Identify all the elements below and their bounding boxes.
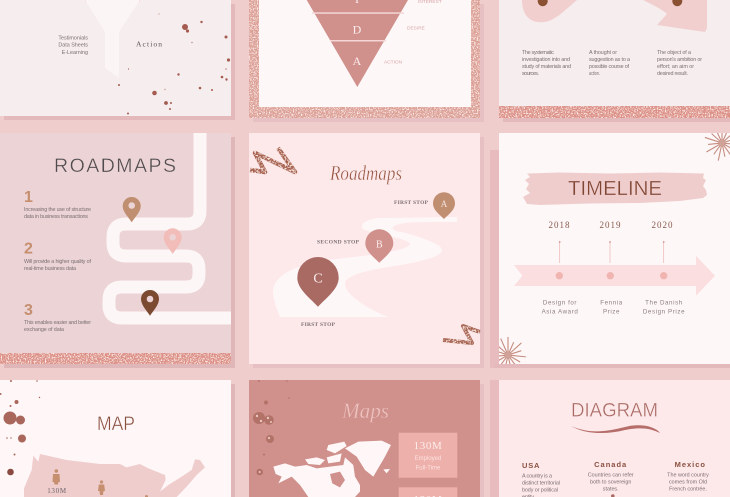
inverted triangle	[307, 0, 408, 87]
triangle letters: D	[353, 22, 362, 36]
definition column 1	[522, 50, 571, 77]
milestone labels: Fennia	[600, 299, 623, 306]
Mexico column: The word country	[667, 472, 709, 478]
Mexico column	[667, 460, 709, 492]
definition column 1: The systematic	[522, 50, 554, 56]
starburst top	[704, 133, 730, 161]
definition column 2: A thought or	[589, 50, 617, 56]
USA column: A country is a	[522, 474, 552, 480]
stat box 1	[399, 433, 457, 478]
glitter squiggle top	[250, 148, 295, 172]
title: ROADMAPS	[54, 155, 176, 177]
definition column 2: possible course of	[589, 64, 630, 70]
funnel shape	[85, 0, 140, 78]
script title: Maps	[341, 398, 389, 423]
panel: diagram slide	[490, 380, 730, 497]
Canada marker	[611, 494, 615, 497]
glitter splatter	[0, 380, 40, 475]
Canada column: both to sovereign	[590, 480, 631, 486]
map pin 3	[141, 290, 159, 316]
starburst bottom	[499, 337, 526, 364]
milestone labels: Asia Award	[542, 308, 578, 316]
panel: three definitions slide	[499, 0, 730, 122]
definition column 3: person's ambition or	[657, 57, 702, 63]
stage labels: INTEREST	[418, 0, 442, 5]
stop labels: FIRST STOP	[301, 322, 336, 328]
glitter squiggle bottom	[443, 326, 480, 343]
stage labels: DESIRE	[407, 26, 425, 32]
USA column	[522, 461, 560, 497]
years	[548, 220, 674, 230]
Canada column: states.	[603, 486, 619, 492]
glitter splatter	[118, 13, 230, 114]
USA column: USA	[522, 461, 540, 470]
pin B: B	[376, 240, 383, 250]
milestone labels: Design for	[543, 299, 577, 306]
funnel list text: Data Sheets	[58, 42, 88, 48]
stop labels: FIRST STOP	[394, 200, 429, 206]
stop labels	[301, 200, 429, 328]
milestone labels: Design Prize	[643, 308, 685, 316]
Canada column	[588, 460, 634, 492]
stage labels: ACTION	[384, 60, 403, 66]
brush banner	[523, 172, 707, 205]
milestone labels: The Danish	[645, 299, 683, 306]
world map	[273, 441, 391, 497]
map marker top	[145, 495, 148, 497]
stat box 2	[399, 487, 457, 497]
step 2: 2	[24, 240, 33, 258]
action label: Action	[136, 40, 162, 48]
step 2: Will provide a higher quality of	[24, 259, 92, 265]
panel: roadmaps slide	[0, 133, 235, 368]
funnel list text: E-Learning	[62, 50, 88, 56]
step 1	[24, 189, 91, 220]
panel: funnel action slide	[0, 0, 235, 120]
pin A	[433, 192, 455, 219]
years: 2020	[652, 220, 674, 230]
map pin 1	[123, 197, 141, 222]
panel: timeline slide	[490, 125, 730, 373]
years: 2018	[548, 220, 570, 230]
funnel list text: Testimonials	[58, 36, 88, 42]
step 1: 1	[24, 189, 33, 206]
timeline title: TIMELINE	[568, 177, 662, 200]
pin A: A	[441, 199, 448, 209]
step 3	[24, 302, 91, 333]
definition column 2: suggestion as to a	[589, 57, 630, 63]
definition column 1: investigation into and	[522, 57, 570, 63]
definition column 3: effort; an aim or	[657, 64, 694, 70]
stat box 1: 130M	[414, 440, 442, 452]
funnel list text	[58, 36, 88, 56]
step 2	[24, 240, 92, 272]
definition column 2: action.	[589, 71, 600, 77]
triangle letters	[353, 0, 362, 68]
step 3: 3	[24, 302, 33, 319]
stat box 1: Full-Time	[416, 466, 441, 472]
step 2: real-time business data	[24, 266, 76, 272]
pink arrow band	[522, 0, 707, 32]
definition column 1: sources.	[522, 71, 539, 77]
panel: AIDA pyramid slide	[249, 0, 484, 122]
arrow	[514, 256, 715, 296]
pin C	[297, 257, 339, 307]
USA column: body or political	[522, 488, 558, 494]
pin B	[365, 229, 393, 263]
Canada column: Canada	[594, 460, 627, 469]
milestone labels: Prize	[603, 308, 620, 316]
panel: script roadmaps slide	[249, 133, 484, 368]
panel: maps slide	[249, 380, 484, 497]
definition column 3	[657, 50, 702, 77]
swoosh	[571, 425, 660, 433]
definition column 3: desired result.	[657, 71, 688, 77]
step 3: This enables easier and better	[24, 320, 91, 326]
pin C: C	[313, 272, 323, 286]
map figure label: 130M	[47, 487, 67, 495]
map pin 2	[164, 228, 182, 254]
Mexico column: French contrée.	[669, 486, 707, 492]
map title: MAP	[97, 414, 135, 435]
step 1: Increasing the use of structure	[24, 207, 91, 213]
USA map	[24, 454, 205, 497]
winding road	[273, 217, 457, 317]
stage labels	[384, 0, 442, 66]
definition column 3: The object of a	[657, 50, 691, 56]
years: 2019	[600, 220, 622, 230]
person icon 1	[52, 469, 60, 484]
stop labels: SECOND STOP	[317, 240, 360, 246]
Mexico column: Mexico	[675, 460, 706, 469]
definition column 2	[589, 50, 630, 77]
milestone labels	[542, 299, 685, 316]
panel: map slide	[0, 380, 235, 497]
definition column 1: study of materials and	[522, 64, 571, 70]
script title: Roadmaps	[329, 161, 402, 185]
glitter splatter	[253, 380, 290, 475]
USA column: distinct territorial	[522, 480, 560, 486]
tick lines	[560, 242, 664, 263]
Mexico column: comes from Old	[669, 480, 707, 486]
stat box 1: Employed	[415, 456, 441, 462]
step 1: data in business transactions	[24, 214, 88, 220]
Canada column: Countries can refer	[588, 472, 634, 478]
step 3: exchange of data	[24, 327, 64, 333]
road	[109, 133, 231, 318]
triangle letters: A	[353, 54, 362, 68]
arrow dots	[556, 272, 667, 279]
diagram title: DIAGRAM	[571, 401, 658, 422]
person icon 2	[98, 480, 105, 495]
brown markers	[538, 0, 548, 6]
